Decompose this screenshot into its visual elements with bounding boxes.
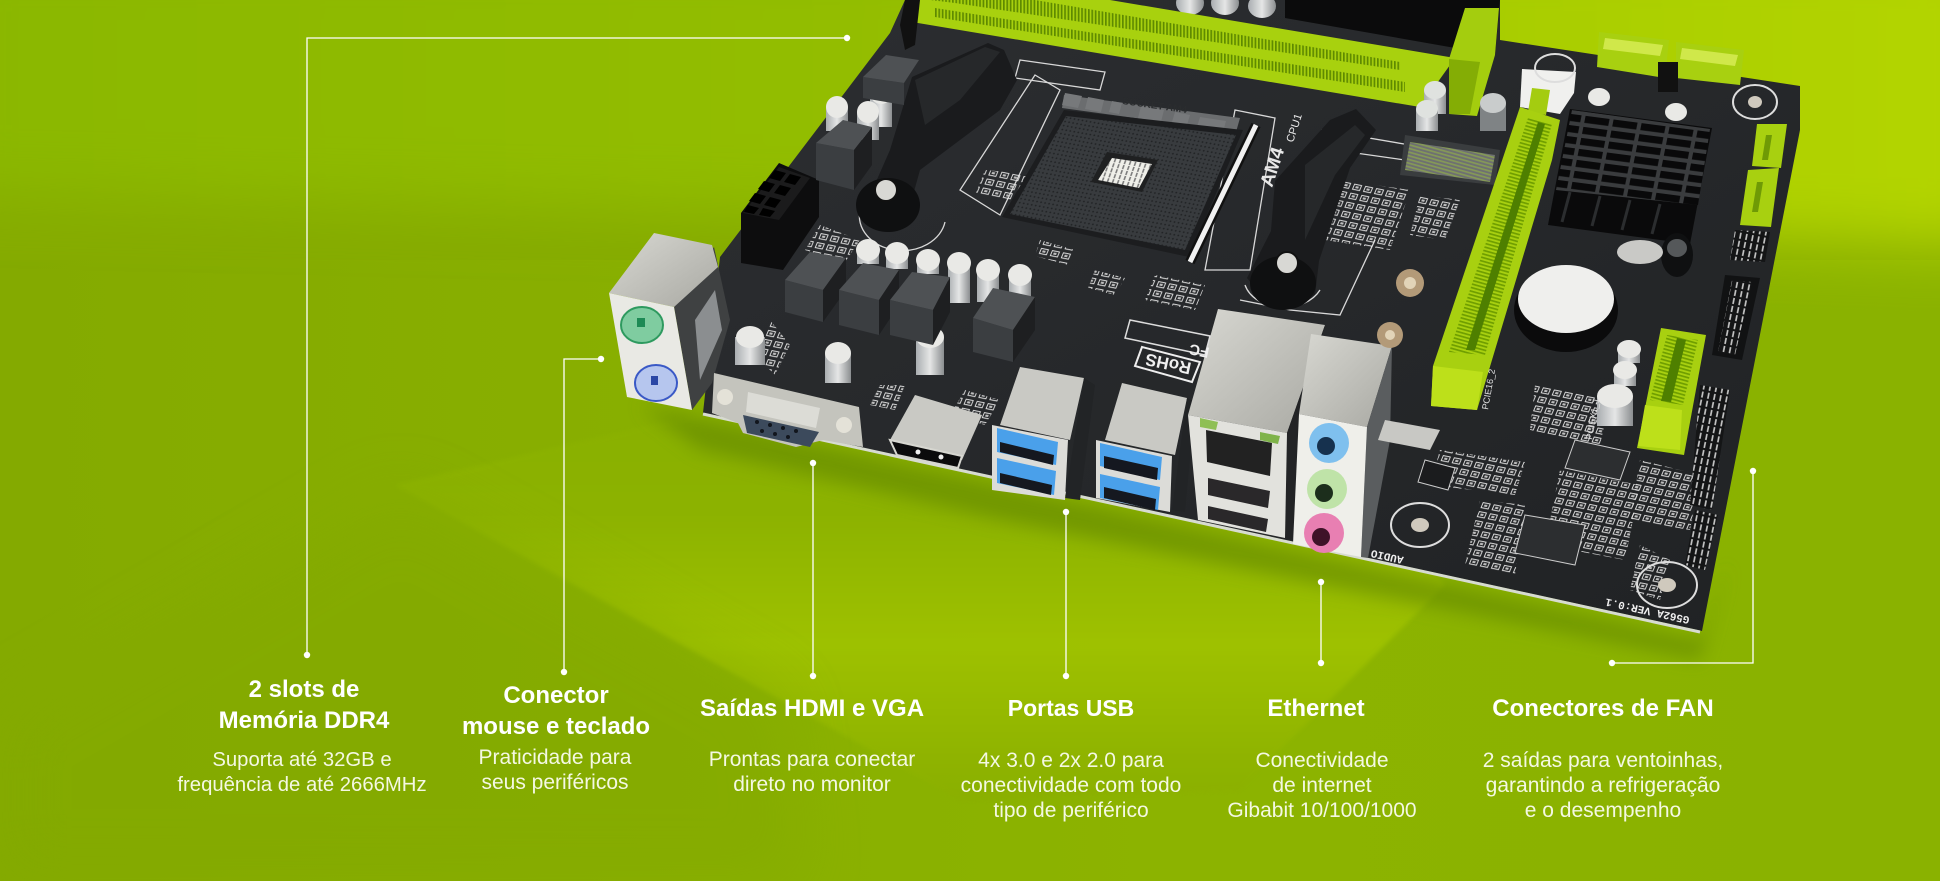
text: fan: e o desempenho [1525, 799, 1681, 822]
heading: Ethernet: Ethernet [1267, 695, 1365, 722]
text: memory: Suporta até 32GB e [212, 749, 392, 771]
text: memory [177, 749, 427, 796]
text: HDMI and VGA [709, 748, 915, 796]
heading: memory [219, 676, 390, 734]
green PS/2 port [621, 307, 663, 343]
silkscreen outlines [859, 60, 1410, 315]
heading: mouse and keyboard [462, 682, 650, 740]
PCIe x16 label: PCIE16_2 [1480, 368, 1497, 410]
text: mouse and keyboard: seus periféricos [481, 771, 629, 794]
motherboard [609, 0, 1800, 660]
HDMI port [890, 395, 982, 468]
board front edge [703, 414, 1700, 632]
M.2 socket area [1377, 135, 1500, 348]
heading: USB: Portas USB [1008, 695, 1134, 721]
text: fan [1483, 749, 1723, 822]
text: HDMI and VGA: direto no monitor [733, 773, 891, 796]
text: USB: tipo de periférico [993, 799, 1149, 822]
circuit board [703, 0, 1800, 631]
text: Ethernet: Gibabit 10/100/1000 [1227, 799, 1417, 822]
RoHS and FC marks [1125, 320, 1211, 382]
text: Ethernet [1227, 749, 1417, 822]
chipset heat sink [1548, 109, 1712, 277]
audio jacks [1293, 334, 1392, 558]
leader: fan connectors [1609, 468, 1756, 666]
text: USB: 4x 3.0 e 2x 2.0 para [978, 749, 1164, 772]
USB 3.0 port stacks [992, 367, 1195, 512]
headers and fan connectors [900, 0, 1770, 570]
heading: memory: 2 slots de [249, 676, 359, 703]
heading: mouse and keyboard: mouse e teclado [462, 713, 650, 740]
heading: HDMI and VGA: Saídas HDMI e VGA [700, 695, 924, 722]
blue PS/2 port [635, 365, 677, 401]
controller chips [1378, 420, 1630, 565]
VGA connector [712, 373, 863, 447]
text: memory: frequência de até 2666MHz [177, 774, 427, 796]
RAM slots [912, 0, 1500, 116]
CMOS battery [1514, 265, 1618, 352]
text: mouse and keyboard [479, 746, 632, 794]
heading: mouse and keyboard: Conector [503, 682, 609, 709]
rear panel PS/2 ports [609, 233, 730, 410]
text: USB [961, 749, 1181, 822]
socket label: SOCKET AM4 [1122, 96, 1188, 116]
PCIe x16 slot [1431, 69, 1576, 410]
capacitors [735, 81, 1687, 426]
heading: fan: Conectores de FAN [1492, 695, 1714, 722]
CPU socket AM4 [1002, 93, 1256, 262]
RoHS and FC marks: FC [1188, 340, 1211, 361]
PCIe x1 label: PCIEX1_1 [1584, 397, 1601, 440]
text: fan: 2 saídas para ventoinhas, [1483, 749, 1723, 772]
text: mouse and keyboard: Praticidade para [479, 746, 631, 769]
CPU retention brackets [856, 43, 1376, 310]
CPU label: CPU1 [1284, 112, 1305, 144]
board shadow [640, 405, 1730, 660]
board version label: G562A VER:0.1 [1604, 594, 1691, 625]
mounting holes [1391, 54, 1777, 608]
text: HDMI and VGA: Prontas para conectar [709, 748, 915, 771]
PCIe x1 slot [1584, 328, 1706, 455]
text: USB: conectividade com todo [961, 774, 1181, 797]
text: fan: garantindo a refrigeração [1486, 774, 1720, 797]
text: Ethernet: de internet [1272, 774, 1372, 797]
heading: memory: Memória DDR4 [219, 707, 389, 734]
leader: HDMI and VGA [810, 460, 816, 679]
socket silkscreen labels: AM4 [1257, 144, 1289, 190]
leader: Ethernet [1318, 579, 1324, 666]
RoHS and FC marks: RoHS [1144, 349, 1193, 378]
silkscreen component clusters [755, 170, 1700, 600]
power connector [741, 163, 819, 270]
Ethernet RJ45 port [1188, 309, 1325, 540]
inductor chokes [785, 55, 1035, 362]
text: Ethernet: Conectividade [1255, 749, 1389, 772]
leader: memory slots [304, 35, 850, 658]
leader: USB [1063, 509, 1069, 679]
SATA connectors [1597, 32, 1787, 227]
audio label: AUDIO [1370, 546, 1405, 565]
leader: mouse and keyboard [561, 356, 604, 675]
